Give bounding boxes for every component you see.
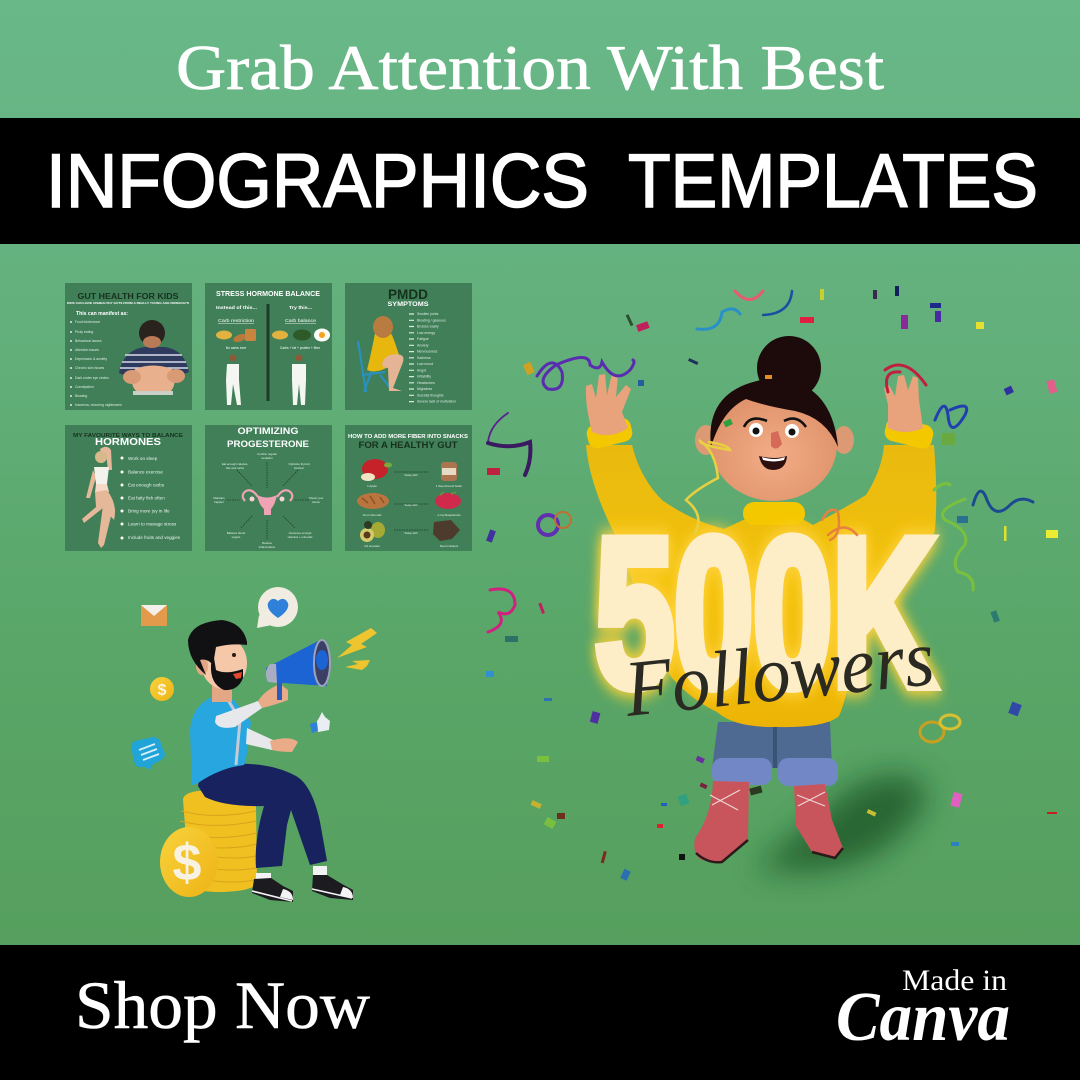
navy trousers [198, 764, 327, 868]
panel: gut health for kids [65, 283, 192, 410]
panel: gut health for kids: KIDS CAN HAVE UNHEALTHY GUTS FROM A REALLY YOUNG AGE NOWADAYS [67, 302, 189, 305]
panel: optimizing progesterone: Reduce [262, 541, 272, 545]
icon: chat bubble [131, 737, 165, 770]
panel: PMDD symptoms: Severe lack of motivation [417, 400, 456, 404]
call to action: Shop Now: Shop Now [75, 967, 370, 1043]
panel: fiber snacks: FOR A HEALTHY GUT [358, 440, 458, 450]
panel: optimizing progesterone: ovulation [261, 456, 273, 460]
badge: Made in Canva: Made in [902, 964, 1007, 997]
icon: dollar coin [150, 677, 174, 701]
panel: gut health for kids: Food intolerance [75, 320, 100, 324]
panel: fiber snacks [345, 425, 472, 551]
confetti pieces [486, 286, 1058, 881]
panel: gut health for kids: Dark under eye circles [75, 376, 109, 380]
panel: optimizing progesterone: Balance blood [227, 531, 246, 535]
food icons [216, 328, 330, 344]
panel: optimizing progesterone: Check your [309, 496, 323, 500]
nose [771, 431, 782, 449]
panel: stress hormone balance: Carb balance [285, 318, 317, 323]
icon: lightning bolts [337, 628, 377, 670]
illustration: celebrating girl [585, 336, 938, 872]
coin stack: $ [173, 834, 202, 892]
panel: PMDD symptoms: Bruises easily [417, 324, 439, 328]
icon: dollar coin: $ [158, 682, 167, 699]
panel: fiber snacks: Swap with [404, 473, 418, 477]
red boots [694, 781, 843, 862]
panel: fiber snacks: 1 Apple [367, 484, 377, 488]
panel: gut health for kids: Depression & anxiety [75, 357, 107, 361]
panel: PMDD symptoms: Swollen joints [417, 312, 439, 316]
confetti streamers [488, 291, 1033, 742]
floor shadow [755, 774, 926, 872]
icon: envelope [141, 605, 167, 626]
two women in white [226, 354, 306, 405]
panel: optimizing progesterone: Optimize thyroid [289, 462, 310, 466]
sweater cuffs and collar [585, 416, 935, 525]
Followers script: Followers [620, 614, 938, 734]
panel: fiber snacks: 1 cup Raspberries [437, 513, 461, 517]
panel: favourite ways to balance hormones [65, 425, 192, 551]
panel: favourite ways to balance hormones: Eat enough carbs [128, 482, 165, 488]
head [188, 620, 247, 702]
panel: gut health for kids: Constipation [75, 385, 94, 389]
hands [586, 374, 923, 435]
snack pictures [357, 459, 461, 542]
panel: fiber snacks: HOW TO ADD MORE FIBER INTO SNACKS [348, 434, 468, 440]
panel: PMDD symptoms [345, 283, 472, 410]
heading: Grab Attention With Best: Grab Attention With Best [176, 32, 884, 103]
badge: Made in Canva: Canva [836, 979, 1010, 1056]
panel: PMDD symptoms: Angst [417, 368, 426, 372]
panel: stress hormone balance [205, 283, 332, 410]
hair [710, 378, 838, 447]
panel: optimizing progesterone: vitamins + minerals [288, 535, 313, 539]
panel: optimizing progesterone: Confirm regular [257, 452, 277, 456]
panel: stress hormone balance: No carbs ever [226, 346, 247, 350]
panel: optimizing progesterone: OPTIMIZING [238, 426, 298, 436]
panel: optimizing progesterone: Consume enough [289, 531, 312, 535]
panel: PMDD symptoms: Bloating / gaseous [417, 318, 446, 322]
panel: optimizing progesterone: Eat enough calories, [222, 462, 248, 466]
panel: optimizing progesterone: sugars [232, 535, 241, 539]
panel: gut health for kids: Attention issues [75, 348, 99, 352]
panel: optimizing progesterone: PROGESTERONE [227, 439, 309, 449]
panel: PMDD symptoms: Sadness [417, 356, 431, 360]
panel: PMDD symptoms: SYMPTOMS [388, 301, 429, 308]
panel: optimizing progesterone: fats and carbs [226, 466, 245, 470]
panel: fiber snacks: 10 oz Almonds [363, 513, 382, 517]
panel: PMDD symptoms: Low mood [417, 362, 433, 366]
footer band [0, 945, 1080, 1080]
panel: gut health for kids: GUT HEALTH FOR KIDS [78, 292, 179, 301]
coin stack [160, 790, 257, 897]
panel: PMDD symptoms: Fatigue [417, 337, 429, 341]
panel: stress hormone balance: STRESS HORMONE BALANCE [216, 291, 320, 298]
panel: favourite ways to balance hormones: Learn to manage stress [128, 522, 177, 526]
panel: fiber snacks: 1 tbsp Almond butter [436, 484, 462, 488]
panel: favourite ways to balance hormones: HORMONES [95, 437, 161, 448]
icon: thumbs up [310, 712, 330, 733]
panel: PMDD symptoms: Low energy [417, 331, 435, 335]
boy figure [119, 320, 189, 395]
blue shirt [190, 697, 251, 785]
panel: PMDD symptoms: Headaches [417, 381, 435, 385]
panel: optimizing progesterone: happier [214, 500, 224, 504]
panel: stress hormone balance: Carb restriction [218, 318, 255, 323]
panel: optimizing progesterone [205, 425, 332, 551]
yellow sweater [586, 445, 936, 727]
panel: PMDD symptoms: Irritability [417, 375, 431, 379]
head and face [710, 378, 838, 501]
title: Infographics Templates: INFOGRAPHICS [46, 139, 589, 224]
panel: fiber snacks: Swap with [404, 531, 418, 535]
panel: fiber snacks: Seed crackers [440, 544, 459, 548]
panel: stress hormone balance: Carbs + fat + protein + fiber [280, 346, 321, 350]
panel: favourite ways to balance hormones: MY FAVOURITE WAYS TO BALANCE [73, 433, 183, 439]
panel: PMDD symptoms: PMDD [388, 286, 428, 302]
panel: fiber snacks: 1/2 avocado [364, 544, 380, 548]
panel: favourite ways to balance hormones: Work on sleep [128, 456, 158, 461]
panel: PMDD symptoms: Migraines [417, 387, 432, 391]
panel: optimizing progesterone: stress [312, 500, 320, 504]
panel: gut health for kids: Behavioral issues [75, 339, 102, 343]
panel: gut health for kids: Chronic skin issues [75, 366, 105, 370]
hair bun [757, 336, 821, 400]
panel: optimizing progesterone: inflammation [259, 545, 276, 549]
panel: favourite ways to balance hormones: Eat fatty fish often [128, 496, 165, 500]
title: Infographics Templates [46, 139, 1038, 224]
panel: stress hormone balance: Try this... [289, 305, 312, 310]
panel: favourite ways to balance hormones: Bring more joy in life [128, 508, 170, 514]
icon: heart speech bubble [257, 587, 298, 628]
panel: optimizing progesterone: Maintain [214, 496, 225, 500]
upper arm [215, 684, 288, 728]
seated woman in yellow [358, 316, 403, 392]
panel: gut health for kids: Bloating [75, 394, 87, 398]
title band [0, 118, 1080, 244]
panel: favourite ways to balance hormones: Include fruits and veggies [128, 535, 181, 540]
mouth [759, 456, 787, 470]
panel: favourite ways to balance hormones: Balance exercise [128, 470, 163, 474]
panel: gut health for kids: Insomnia, recurring nightmares [75, 403, 122, 407]
standing woman [82, 447, 115, 548]
ears [695, 425, 854, 455]
panel: PMDD symptoms: Anxiety [417, 343, 429, 347]
panel: PMDD symptoms: Nervousness [417, 350, 438, 354]
title: Infographics Templates: TEMPLATES [628, 139, 1038, 224]
panel: gut health for kids: Picky eating [75, 330, 93, 334]
panel: optimizing progesterone: function [294, 466, 304, 470]
500K headline: 500K [595, 495, 935, 730]
panel: fiber snacks: Swap with [404, 503, 418, 507]
shoes [252, 866, 353, 902]
uterus icon [243, 490, 292, 515]
lower arm [246, 728, 298, 752]
eyes and brows [744, 419, 806, 438]
panel: gut health for kids: This can manifest as: [76, 311, 128, 317]
panel: stress hormone balance: Instead of this... [216, 305, 257, 310]
illustration: man with megaphone on coins [131, 587, 377, 902]
megaphone [266, 639, 330, 700]
denim shorts [712, 722, 838, 786]
panel: PMDD symptoms: Suicidal thoughts [417, 393, 444, 397]
